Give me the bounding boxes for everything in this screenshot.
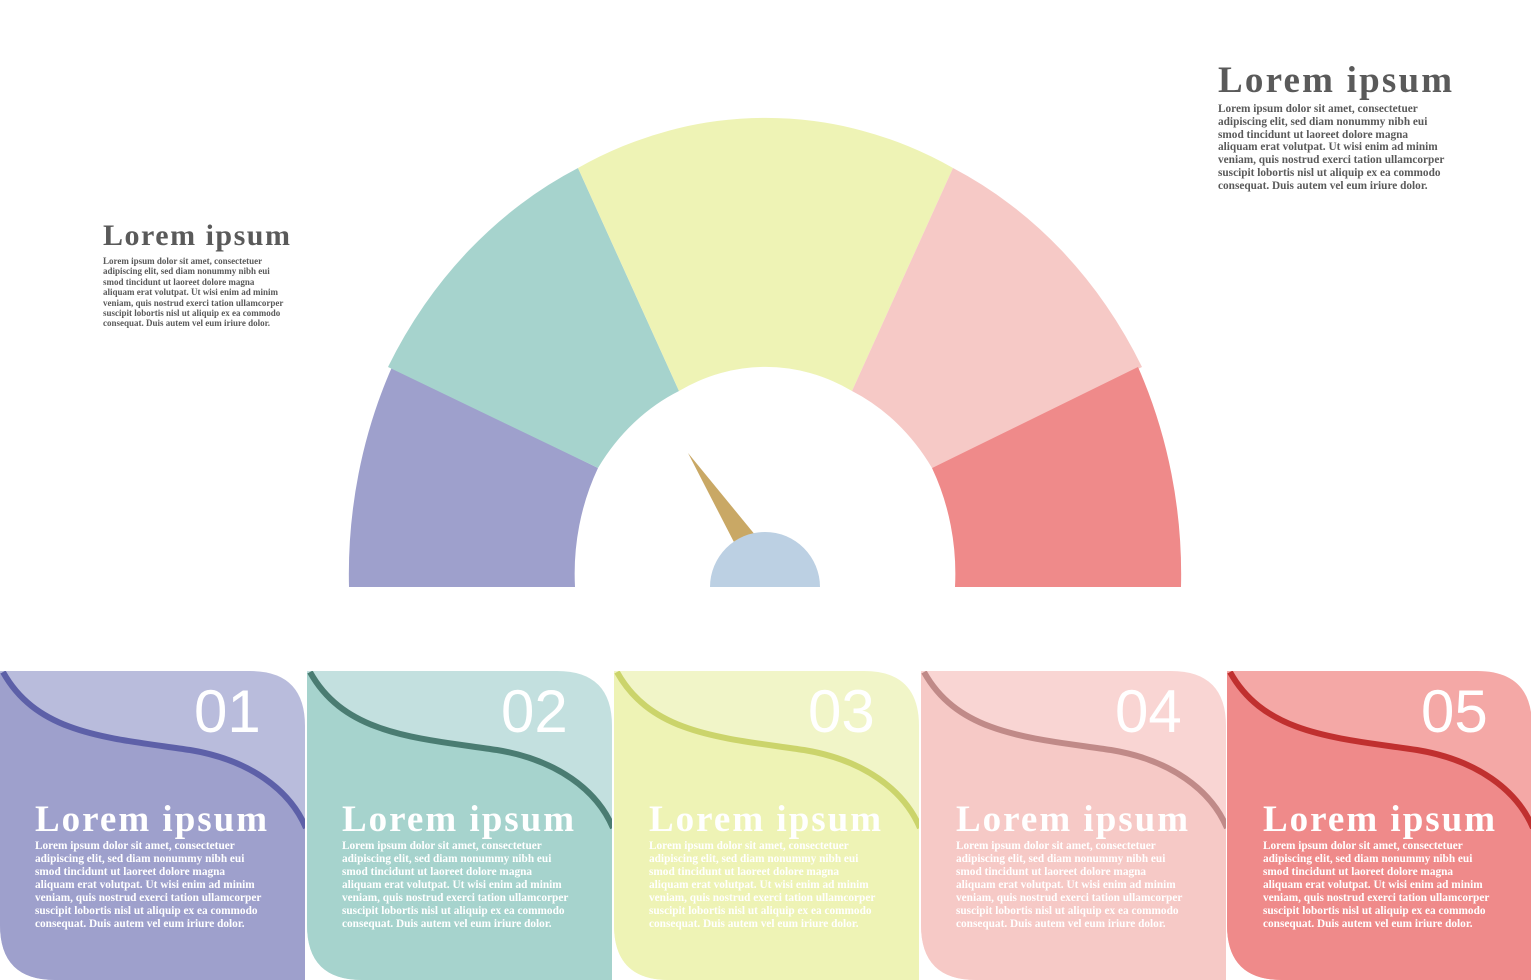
- right text block: Lorem ipsum dolor sit amet, consectetuer: [1218, 103, 1418, 115]
- left text block: veniam, quis nostrud exerci tation ullamcorper: [103, 298, 283, 308]
- card 3 text: consequat. Duis autem vel eum iriure dolor.: [649, 918, 859, 930]
- card 3 text: Lorem ipsum: [649, 799, 883, 840]
- segment teal: [388, 168, 679, 468]
- card 4 text: suscipit lobortis nisl ut aliquip ex ea commodo: [956, 905, 1179, 917]
- card 4 text: Lorem ipsum dolor sit amet, consectetuer: [956, 840, 1156, 852]
- card 5 text: [1263, 799, 1497, 930]
- card 2 text: [342, 799, 576, 930]
- segment pink: [852, 168, 1142, 468]
- card shapes: [0, 671, 1531, 980]
- card 4 text: [956, 799, 1190, 930]
- left text block: smod tincidunt ut laoreet dolore magna: [103, 277, 254, 287]
- card 3 text: [649, 799, 883, 930]
- number 03: 03: [808, 678, 875, 745]
- card 1 text: Lorem ipsum: [35, 799, 269, 840]
- number 04: 04: [1115, 678, 1182, 745]
- card 2 text: veniam, quis nostrud exerci tation ullamcorper: [342, 892, 568, 904]
- card 5 text: veniam, quis nostrud exerci tation ullamcorper: [1263, 892, 1489, 904]
- card 2 text: Lorem ipsum: [342, 799, 576, 840]
- card 2 text: suscipit lobortis nisl ut aliquip ex ea commodo: [342, 905, 565, 917]
- number 05: 05: [1421, 678, 1488, 745]
- card 5 text: smod tincidunt ut laoreet dolore magna: [1263, 866, 1453, 878]
- card 1 text: Lorem ipsum dolor sit amet, consectetuer: [35, 840, 235, 852]
- card 3 text: aliquam erat volutpat. Ut wisi enim ad minim: [649, 879, 869, 891]
- card 5 text: consequat. Duis autem vel eum iriure dolor.: [1263, 918, 1473, 930]
- card 5 text: suscipit lobortis nisl ut aliquip ex ea commodo: [1263, 905, 1486, 917]
- card 4 text: Lorem ipsum: [956, 799, 1190, 840]
- card 5 text: aliquam erat volutpat. Ut wisi enim ad minim: [1263, 879, 1483, 891]
- right text block: Lorem ipsum: [1218, 60, 1454, 101]
- left text block: Lorem ipsum dolor sit amet, consectetuer: [103, 256, 262, 266]
- card 2 text: Lorem ipsum dolor sit amet, consectetuer: [342, 840, 542, 852]
- right text block: [1218, 60, 1454, 192]
- card 3 text: adipiscing elit, sed diam nonummy nibh eui: [649, 853, 858, 865]
- left text block: consequat. Duis autem vel eum iriure dolor.: [103, 318, 270, 328]
- card 1 text: smod tincidunt ut laoreet dolore magna: [35, 866, 225, 878]
- segment yellow: [578, 118, 953, 391]
- card 4 text: veniam, quis nostrud exerci tation ullamcorper: [956, 892, 1182, 904]
- card 1 text: veniam, quis nostrud exerci tation ullamcorper: [35, 892, 261, 904]
- card 4 text: consequat. Duis autem vel eum iriure dolor.: [956, 918, 1166, 930]
- card 1 text: adipiscing elit, sed diam nonummy nibh eui: [35, 853, 244, 865]
- card 4 text: aliquam erat volutpat. Ut wisi enim ad minim: [956, 879, 1176, 891]
- card 1 text: aliquam erat volutpat. Ut wisi enim ad minim: [35, 879, 255, 891]
- card 5 text: Lorem ipsum: [1263, 799, 1497, 840]
- card 3 text: smod tincidunt ut laoreet dolore magna: [649, 866, 839, 878]
- card 5 text: adipiscing elit, sed diam nonummy nibh eui: [1263, 853, 1472, 865]
- right text block: suscipit lobortis nisl ut aliquip ex ea commodo: [1218, 167, 1441, 179]
- card 4 text: adipiscing elit, sed diam nonummy nibh eui: [956, 853, 1165, 865]
- number 01: 01: [194, 678, 261, 745]
- right text block: adipiscing elit, sed diam nonummy nibh eui: [1218, 116, 1427, 128]
- card 2 text: consequat. Duis autem vel eum iriure dolor.: [342, 918, 552, 930]
- card 3 text: Lorem ipsum dolor sit amet, consectetuer: [649, 840, 849, 852]
- card 4 text: smod tincidunt ut laoreet dolore magna: [956, 866, 1146, 878]
- segment red: [932, 367, 1181, 587]
- card 3 text: veniam, quis nostrud exerci tation ullamcorper: [649, 892, 875, 904]
- card 2 text: adipiscing elit, sed diam nonummy nibh eui: [342, 853, 551, 865]
- card 2 text: aliquam erat volutpat. Ut wisi enim ad minim: [342, 879, 562, 891]
- segment purple: [349, 367, 598, 587]
- card 5 text: Lorem ipsum dolor sit amet, consectetuer: [1263, 840, 1463, 852]
- number 02: 02: [501, 678, 568, 745]
- card 1 text: [35, 799, 269, 930]
- left text block: aliquam erat volutpat. Ut wisi enim ad minim: [103, 287, 278, 297]
- left text block: suscipit lobortis nisl ut aliquip ex ea commodo: [103, 308, 280, 318]
- right text block: veniam, quis nostrud exerci tation ullamcorper: [1218, 154, 1444, 166]
- card 1 text: suscipit lobortis nisl ut aliquip ex ea commodo: [35, 905, 258, 917]
- card 2 text: smod tincidunt ut laoreet dolore magna: [342, 866, 532, 878]
- right text block: aliquam erat volutpat. Ut wisi enim ad minim: [1218, 141, 1438, 153]
- left text block: [103, 219, 291, 328]
- left text block: adipiscing elit, sed diam nonummy nibh eui: [103, 266, 270, 276]
- card 3 text: suscipit lobortis nisl ut aliquip ex ea commodo: [649, 905, 872, 917]
- right text block: consequat. Duis autem vel eum iriure dolor.: [1218, 180, 1428, 192]
- left text block: Lorem ipsum: [103, 219, 291, 252]
- needle: [688, 453, 756, 548]
- gauge: [349, 118, 1181, 587]
- right text block: smod tincidunt ut laoreet dolore magna: [1218, 129, 1408, 141]
- card 1 text: consequat. Duis autem vel eum iriure dolor.: [35, 918, 245, 930]
- hub: [710, 532, 820, 587]
